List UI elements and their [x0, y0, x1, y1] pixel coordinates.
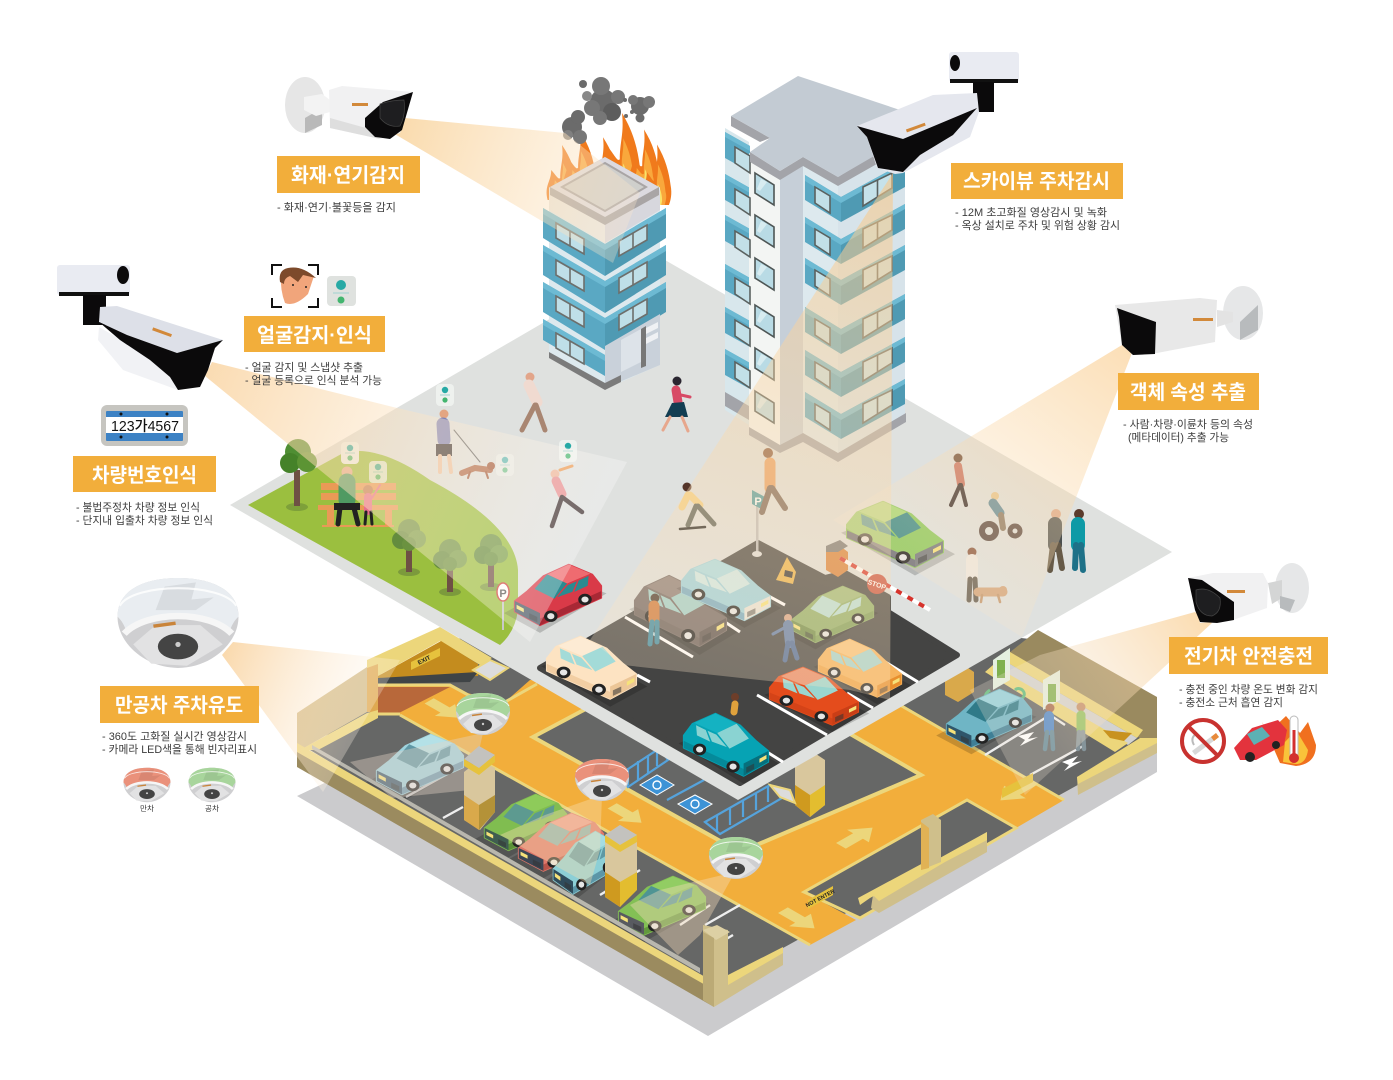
trees and bench	[280, 439, 509, 630]
label: ev safe charging: - 충전 중인 차량 온도 변화 감지	[1179, 683, 1318, 696]
label: license plate recognition: 차량번호인식	[92, 464, 197, 487]
camera: ev charging	[1188, 563, 1309, 623]
camera: dome large	[118, 578, 238, 668]
icon: verified badge	[327, 276, 356, 306]
balcony bands	[725, 132, 905, 222]
exit signs	[411, 648, 1033, 909]
woman by teal car	[731, 693, 739, 712]
label: face recognition: - 얼굴 감지 및 스냅샷 추출	[245, 360, 363, 374]
charging bolts	[1018, 732, 1082, 771]
pillars	[464, 664, 974, 907]
parking lot asphalt	[540, 543, 957, 783]
roof parapet shade	[731, 116, 905, 186]
skater	[680, 482, 714, 529]
legend: full and empty domes	[124, 768, 235, 813]
label: face recognition: 얼굴감지·인식	[257, 324, 372, 347]
wing windows	[815, 187, 830, 213]
camera: object attributes	[1115, 286, 1263, 355]
label: fire detection: - 화재·연기·불꽃등을 감지	[277, 201, 396, 214]
roof	[550, 157, 659, 225]
beam: license plate camera	[205, 362, 627, 642]
centre white column	[749, 153, 780, 447]
parking basement	[297, 600, 1157, 1007]
rooftop level platform	[230, 256, 1172, 800]
back left wall	[297, 667, 367, 752]
corner post and walls	[703, 925, 783, 1007]
label: ev safe charging	[1169, 637, 1328, 709]
boy with dog	[436, 410, 480, 472]
exit signs: NOT ENTER	[805, 889, 836, 909]
pedestrian in lot	[773, 614, 797, 660]
red dome	[575, 759, 629, 801]
back right wall	[1000, 630, 1157, 740]
green dome	[456, 693, 510, 735]
bench	[318, 483, 398, 527]
low building on fire	[543, 77, 671, 390]
man and child on bench	[334, 466, 360, 524]
dog	[462, 462, 495, 478]
beam: dome camera	[222, 642, 400, 792]
basement floor	[310, 600, 1150, 990]
label: skyview parking: - 옥상 설치로 주차 및 위험 상황 감시	[955, 219, 1120, 232]
right wing faces	[803, 157, 838, 456]
floors	[543, 208, 666, 276]
label: object attributes	[1118, 373, 1259, 444]
walls	[549, 187, 660, 390]
label: object attributes: (메타데이터) 추출 가능	[1128, 431, 1229, 444]
label: parking guidance	[100, 686, 259, 756]
lower bay	[804, 800, 1016, 918]
door	[621, 329, 641, 372]
exit signs: EXIT	[417, 655, 432, 667]
label: skyview parking: 스카이뷰 주차감시	[963, 170, 1110, 193]
label: object attributes: - 사람·차량·이륜차 등의 속성	[1123, 418, 1253, 431]
beam: ev camera	[970, 612, 1212, 795]
floor arrows	[425, 698, 1037, 928]
label: parking guidance: - 360도 고화질 실시간 영상감시	[102, 730, 247, 743]
ground shadow	[297, 700, 1157, 1036]
camera: fire detection	[285, 77, 413, 139]
full dome: 만차	[140, 804, 154, 813]
security guard	[1050, 509, 1062, 570]
label: ev safe charging: - 충전소 근처 흡연 감지	[1179, 695, 1283, 709]
barrier gate	[826, 540, 930, 610]
old man walking	[522, 372, 545, 430]
label: parking guidance: - 카메라 LED색을 통해 빈자리표시	[102, 742, 257, 756]
icon: face recognition	[272, 265, 356, 307]
man in teal	[1074, 509, 1084, 570]
front left wall	[297, 750, 714, 1007]
floor domes	[456, 693, 763, 879]
icon: license plate	[101, 405, 188, 446]
handicap bay	[533, 650, 921, 852]
base	[749, 413, 906, 462]
dog walker	[968, 548, 976, 600]
roof	[731, 76, 905, 177]
parking sign: P	[754, 496, 762, 508]
icon: license plate: 123가4567	[111, 418, 179, 435]
people at charger	[1045, 704, 1054, 749]
label: license plate recognition: - 불법주정차 차량 정보 인식	[76, 501, 200, 514]
beam: attribute camera	[833, 345, 1132, 637]
beam: skyview camera	[590, 173, 893, 700]
no parking sign: P	[499, 588, 507, 600]
man with bag	[762, 448, 785, 512]
grass park	[248, 451, 518, 645]
cyclist	[982, 492, 1020, 538]
label: skyview parking: - 12M 초고화질 영상감시 및 녹화	[955, 206, 1107, 219]
label: license plate recognition: - 단지내 입출차 차량 정보 인식	[76, 514, 213, 527]
ev and parking bay lines	[406, 700, 1085, 950]
walker dog	[978, 586, 1007, 602]
label: object attributes: 객체 속성 추출	[1130, 381, 1246, 404]
back wing	[725, 128, 749, 425]
girl with phone	[663, 376, 690, 431]
no parking sign	[497, 583, 509, 630]
stop sign: STOP	[866, 579, 887, 592]
label: skyview parking	[951, 163, 1123, 232]
disabled parking icons	[640, 775, 712, 814]
empty dome: 공차	[205, 804, 219, 813]
label: face recognition: - 얼굴 등록으로 인식 분석 가능	[245, 373, 382, 387]
dome camera beams on floor	[350, 733, 735, 955]
people	[334, 372, 1086, 749]
runner	[550, 466, 582, 526]
label: license plate recognition	[73, 456, 216, 527]
label: fire detection: 화재·연기감지	[291, 164, 405, 187]
disabled parking marks	[619, 748, 782, 834]
label: parking guidance: 만공차 주차유도	[115, 694, 243, 717]
man at car	[650, 594, 660, 644]
base	[549, 352, 621, 390]
parking sign	[752, 490, 765, 557]
a-frame sign	[776, 557, 796, 584]
camera: face and plate recognition	[57, 265, 223, 390]
lot cars	[504, 502, 955, 784]
beam: fire camera	[393, 118, 640, 263]
label: face recognition	[244, 316, 385, 387]
flames	[547, 113, 671, 205]
tall apartment building	[725, 76, 906, 462]
icon: overheating car	[1234, 716, 1316, 766]
face detection badges	[341, 384, 577, 483]
column windows	[755, 173, 774, 205]
orange driveway	[378, 680, 1064, 945]
camera: skyview parking	[857, 52, 1019, 174]
icon: no smoking	[1182, 720, 1224, 762]
basement cars	[366, 689, 1037, 942]
lot parking lines	[625, 587, 918, 762]
green dome	[709, 837, 763, 879]
ev chargers	[985, 648, 1060, 710]
smoke	[562, 77, 655, 144]
windows	[556, 223, 584, 254]
headphone woman	[951, 454, 966, 505]
storage box	[473, 660, 508, 680]
label: fire detection	[277, 156, 420, 214]
trees row	[392, 519, 426, 576]
tree	[280, 439, 317, 511]
label: ev safe charging: 전기차 안전충전	[1184, 645, 1313, 668]
